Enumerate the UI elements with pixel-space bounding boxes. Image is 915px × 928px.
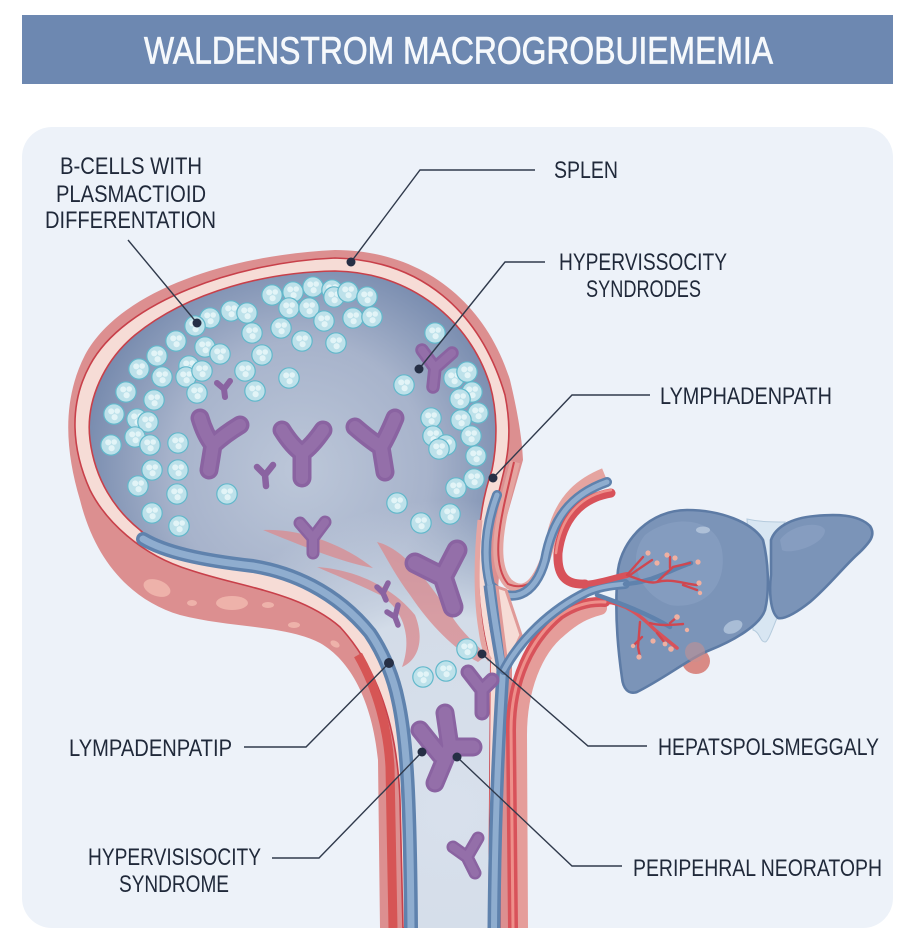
small antibody [257, 465, 273, 486]
left lobe highlight [636, 521, 723, 606]
liver vessel tips [631, 550, 702, 660]
callout: hyperviscosity upper: HYPERVISSOCITY [559, 249, 727, 276]
organ wall: outer tissue [68, 250, 523, 928]
left vein: blue band [143, 539, 411, 928]
callout: splen: SPLEN [554, 157, 618, 184]
callout: lymphadenopathy upper: LYMPHADENPATH [660, 383, 832, 410]
lower right artery and vein to liver [504, 584, 677, 928]
callout: hyperviscosity lower: SYNDROME [119, 871, 229, 898]
right vessel loop [486, 462, 607, 928]
tiny antibody [377, 583, 388, 600]
callout: peripheral neuropathy [452, 752, 882, 882]
antibodies [200, 350, 492, 873]
icon: liver [616, 510, 872, 693]
callout: lymphadenopathy lower [69, 658, 394, 762]
lower right wall wedge [497, 587, 521, 665]
callout: B-cells [45, 153, 216, 328]
organ wall: cream layer with red line [75, 258, 509, 928]
pink tissue blotches in lumen [263, 530, 487, 667]
callout: hyperviscosity lower: HYPERVISISOCITY [88, 844, 261, 871]
antibody middle [300, 522, 325, 553]
callout: B-cells: B-CELLS WITH [60, 153, 202, 180]
antibody lower right [468, 672, 492, 713]
upper red artery to liver [556, 490, 627, 584]
callout: hyperviscosity upper [414, 249, 727, 374]
antibody bottom [453, 838, 478, 873]
title: WALDENSTROM MACROGROBUIEMEMIA [144, 30, 774, 72]
callout: B-cells: PLASMACTIOID [56, 181, 206, 208]
right lobe highlight [780, 525, 825, 551]
callout: hepatosplenomegaly [478, 650, 879, 761]
antibody top right [422, 350, 452, 387]
organ wall: spots [141, 576, 341, 649]
left lobe [616, 510, 768, 693]
callout: lymphadenopathy lower: LYMPADENPATIP [69, 735, 232, 762]
icon: gallbladder [682, 648, 710, 674]
title banner [22, 15, 893, 84]
right lumen edge tissue [477, 520, 490, 660]
B-cells [101, 277, 488, 687]
crossed antibodies [420, 713, 473, 783]
small antibody [217, 381, 230, 397]
liver vessels [597, 557, 697, 657]
antibody 3 [355, 418, 395, 472]
antibody 1 [200, 418, 240, 470]
organ wall: red artery band [358, 655, 393, 928]
callout: B-cells: DIFFERENTATION [45, 207, 216, 234]
callout: lymphadenopathy upper [488, 383, 832, 482]
callout: hyperviscosity lower [88, 748, 426, 898]
organ lumen [89, 271, 496, 928]
antibody large right [415, 550, 457, 607]
gallbladder overlap [685, 642, 705, 662]
callout: hyperviscosity upper: SYNDRODES [586, 276, 701, 303]
callout: splen [346, 157, 618, 266]
right lobe [770, 515, 872, 618]
tiny antibody [387, 605, 398, 625]
antibody 2 [282, 430, 323, 478]
falciform ligament [747, 519, 785, 642]
